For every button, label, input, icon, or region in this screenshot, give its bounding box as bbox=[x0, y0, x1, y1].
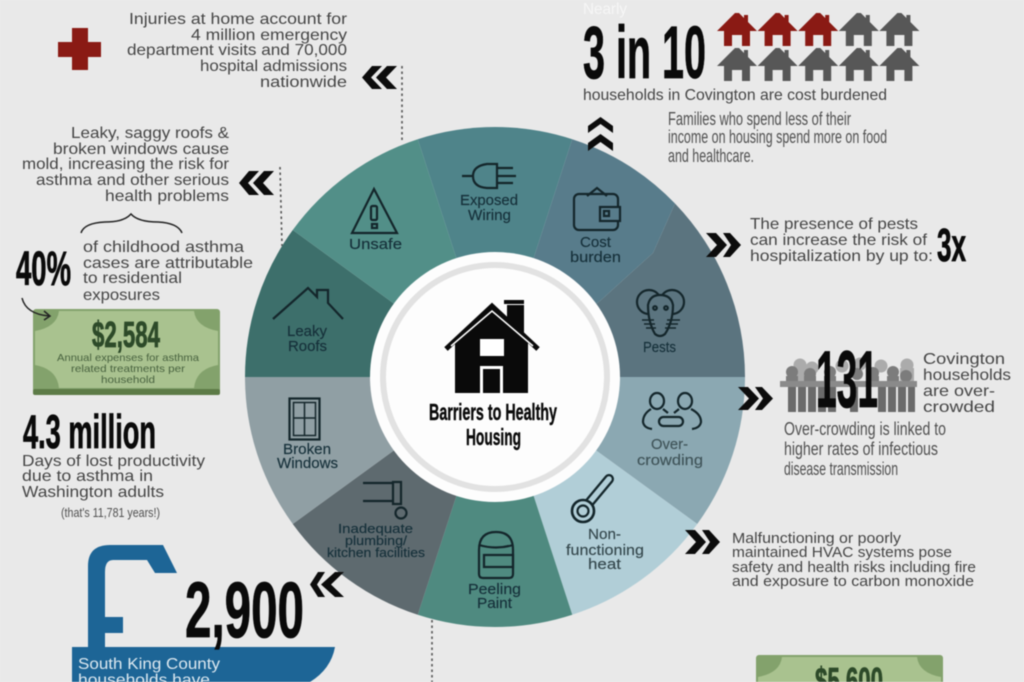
dotted connector: roofs bbox=[280, 167, 282, 246]
icon: paint can bbox=[479, 532, 513, 578]
label: broken windows: Broken bbox=[283, 441, 331, 458]
label: non-functioning heat bbox=[566, 526, 644, 573]
dotted connector: home injuries bbox=[401, 66, 403, 142]
text block: HVAC risks: maintained HVAC systems pose bbox=[732, 544, 952, 561]
text block: home injuries: hospital admissions bbox=[200, 58, 347, 75]
icon: blue faucet bbox=[88, 545, 177, 647]
text block: roofs and mold: mold, increasing the risk for bbox=[22, 156, 230, 173]
text block: childhood asthma: to residential bbox=[83, 270, 182, 287]
handwritten note: families bbox=[668, 109, 887, 166]
arrow: upward chevrons bbox=[588, 117, 613, 151]
label: pests: Pests bbox=[643, 339, 676, 356]
banknote caption: related treatments per bbox=[71, 363, 186, 375]
label: leaky roofs bbox=[287, 323, 327, 355]
icon: window bbox=[290, 398, 320, 440]
handwritten note: infectious disease bbox=[784, 419, 946, 479]
arrow: curved arrow from 40 percent to banknote bbox=[22, 298, 50, 320]
handwritten note: infectious disease: disease transmission bbox=[784, 459, 898, 479]
heading: barriers to healthy housing bbox=[429, 399, 557, 450]
text: 131 bbox=[816, 335, 878, 425]
basin text bbox=[78, 656, 220, 682]
stat: 40 percent: 40% bbox=[16, 243, 71, 296]
label: inadequate plumbing: plumbing/ bbox=[345, 533, 407, 548]
handwritten note: infectious disease: Over-crowding is linked to bbox=[784, 419, 946, 439]
banknote amount: $2,584 bbox=[92, 314, 160, 355]
pictogram: 3 of 10 houses bbox=[717, 13, 919, 81]
text block: roofs and mold bbox=[22, 125, 230, 205]
text block: childhood asthma: exposures bbox=[83, 287, 160, 304]
panel: second banknote bbox=[756, 655, 943, 682]
text block: covington households bbox=[923, 351, 1011, 416]
text block: roofs and mold: broken windows cause bbox=[53, 141, 229, 158]
label: broken windows: Windows bbox=[277, 455, 338, 472]
label: inadequate plumbing: Inadequate bbox=[338, 521, 413, 536]
label: unsafe: Unsafe bbox=[349, 236, 402, 253]
handwritten note: families: Families who spend less of their bbox=[668, 109, 851, 129]
panel: blue sink basin bbox=[72, 647, 335, 682]
text block: home injuries: Injuries at home account for bbox=[129, 11, 348, 28]
text block: childhood asthma: of childhood asthma bbox=[83, 239, 244, 256]
icon: roof bbox=[273, 288, 343, 319]
segment: non-functioning heat bbox=[495, 377, 697, 615]
label: inadequate plumbing: kitchen facilities bbox=[327, 545, 426, 560]
icon: tap with drop bbox=[363, 482, 406, 518]
text block: pests bbox=[750, 216, 933, 265]
text block: roofs and mold: health problems bbox=[105, 188, 229, 205]
handwritten note: years: (that's 11,781 years!) bbox=[61, 505, 160, 520]
label: non-functioning heat: Non- bbox=[588, 526, 621, 543]
label: over-crowding: Over- bbox=[651, 436, 688, 453]
center hub bbox=[370, 252, 620, 502]
label: leaky roofs: Leaky bbox=[287, 323, 327, 340]
label: cost burden bbox=[570, 234, 621, 266]
text block: HVAC risks: safety and health risks including fire bbox=[732, 559, 976, 576]
icon: two people linked bbox=[643, 393, 701, 429]
handwritten note: families: income on housing spend more on food bbox=[668, 127, 887, 147]
text block: lost productivity bbox=[22, 453, 205, 501]
text block: covington households: crowded bbox=[923, 399, 995, 416]
label: non-functioning heat: functioning bbox=[566, 542, 644, 559]
label: over-crowding: crowding bbox=[637, 452, 703, 469]
text block: home injuries: nationwide bbox=[260, 74, 347, 91]
text block: home injuries: department visits and 70,000 bbox=[127, 42, 347, 59]
label: nearly: Nearly bbox=[583, 1, 627, 18]
text block: HVAC risks: and exposure to carbon monoxide bbox=[732, 573, 974, 590]
text block: home injuries bbox=[127, 11, 348, 91]
label: peeling paint: Paint bbox=[477, 595, 513, 612]
panel: asthma expenses banknote bbox=[33, 309, 220, 395]
heading: barriers to healthy housing: Housing bbox=[466, 424, 521, 450]
arrow: chevrons from roofs text bbox=[239, 171, 274, 195]
text: households cost burdened: households in Covington are cost burdened bbox=[583, 87, 887, 104]
text block: covington households: are over- bbox=[923, 383, 995, 400]
label: non-functioning heat: heat bbox=[588, 556, 622, 573]
text block: HVAC risks: Malfunctioning or poorly bbox=[732, 530, 902, 547]
arrow: chevrons from home injuries bbox=[362, 66, 397, 89]
icon: center house bbox=[446, 300, 538, 393]
label: cost burden: burden bbox=[570, 249, 621, 266]
banknote caption: Annual expenses for asthma bbox=[57, 352, 199, 364]
heading: barriers to healthy housing: Barriers to Healthy bbox=[429, 399, 557, 425]
text block: roofs and mold: asthma and other serious bbox=[36, 172, 229, 189]
text block: covington households: households bbox=[923, 367, 1011, 384]
text block: lost productivity: due to asthma in bbox=[22, 468, 153, 485]
donut chart: barriers to healthy housing bbox=[245, 127, 745, 627]
segment: broken windows bbox=[245, 377, 495, 524]
label: exposed wiring: Wiring bbox=[468, 207, 511, 224]
label: over-crowding bbox=[637, 436, 703, 469]
stat: 2,900: 2,900 bbox=[185, 565, 304, 654]
text block: childhood asthma: cases are attributable bbox=[83, 255, 253, 272]
arrow: chevrons to over-crowding bbox=[738, 387, 773, 410]
icon: rat bbox=[637, 290, 684, 336]
text block: covington households: Covington bbox=[923, 351, 1005, 368]
segment: unsafe bbox=[293, 139, 495, 377]
label: exposed wiring bbox=[460, 192, 518, 224]
basin text: South King County bbox=[78, 656, 220, 673]
arrow: chevrons to pests text bbox=[706, 233, 741, 257]
pictogram: crowded table of people bbox=[780, 358, 917, 412]
label: exposed wiring: Exposed bbox=[460, 192, 518, 209]
segment: over-crowding bbox=[495, 377, 745, 524]
banknote caption bbox=[57, 352, 199, 386]
label: peeling paint bbox=[468, 581, 521, 612]
stat: 4.3 million: 4.3 million bbox=[23, 405, 156, 458]
banknote caption: household bbox=[101, 374, 155, 386]
icon: wallet bbox=[574, 188, 620, 230]
segment: cost burden bbox=[495, 139, 675, 377]
dotted connector: bottom bbox=[431, 620, 433, 682]
segment: leaky roofs bbox=[245, 230, 495, 377]
icon: thermometer bbox=[572, 479, 609, 522]
segment: peeling paint bbox=[418, 377, 572, 627]
icon: curly brace bbox=[81, 214, 182, 233]
text block: lost productivity: Days of lost productivity bbox=[22, 453, 205, 470]
text block: pests: hospitalization by up to: bbox=[750, 248, 933, 265]
text block: pests: can increase the risk of bbox=[750, 232, 928, 249]
stat: 3 in 10: 3 in 10 bbox=[583, 11, 706, 94]
label: broken windows bbox=[277, 441, 338, 472]
icon: plug bbox=[462, 164, 516, 188]
text block: pests: The presence of pests bbox=[750, 216, 918, 233]
segment: inadequate plumbing bbox=[293, 377, 495, 615]
handwritten note: families: and healthcare. bbox=[668, 146, 754, 166]
text block: home injuries: 4 million emergency bbox=[191, 27, 347, 44]
arrow: chevrons from plumbing bbox=[310, 572, 344, 597]
label: inadequate plumbing bbox=[327, 521, 426, 560]
icon: red medical cross bbox=[58, 28, 101, 70]
handwritten note: infectious disease: higher rates of infectious bbox=[784, 439, 938, 459]
label: cost burden: Cost bbox=[580, 234, 612, 251]
stat: 3x: 3x bbox=[937, 219, 966, 271]
text block: roofs and mold: Leaky, saggy roofs & bbox=[71, 125, 229, 142]
text block: childhood asthma bbox=[83, 239, 253, 304]
segment: pests bbox=[495, 204, 745, 377]
label: leaky roofs: Roofs bbox=[288, 338, 327, 355]
arrow: chevrons to heating text bbox=[685, 530, 720, 554]
segment: exposed wiring bbox=[418, 127, 572, 377]
text block: lost productivity: Washington adults bbox=[22, 484, 164, 501]
label: peeling paint: Peeling bbox=[468, 581, 521, 598]
text block: HVAC risks bbox=[732, 530, 976, 590]
icon: warning triangle bbox=[352, 189, 397, 233]
